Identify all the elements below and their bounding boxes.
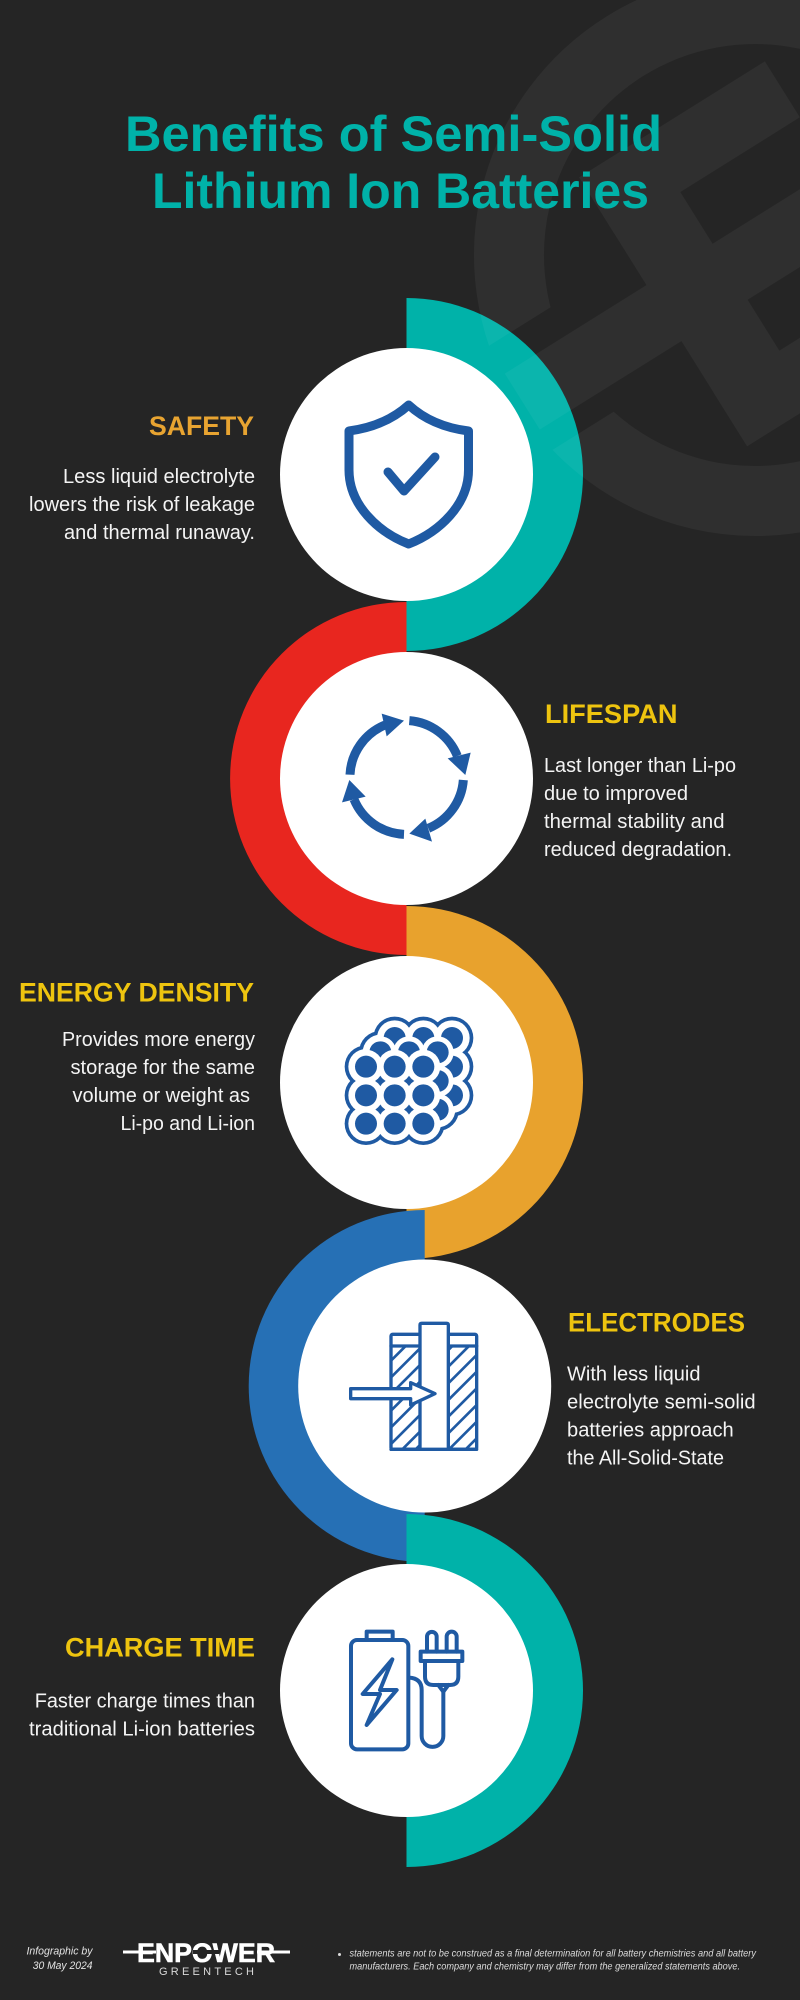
text: charge time description: traditional Li-ion batteries [29, 1719, 255, 1741]
text: energy density description [62, 1029, 255, 1135]
panel: safety [29, 348, 533, 601]
panel: energy density [19, 956, 533, 1209]
footer credit [26, 1946, 94, 1972]
white circle: electrodes [298, 1260, 551, 1512]
text: energy density description: storage for the same [70, 1057, 255, 1079]
text: charge time description [29, 1691, 255, 1741]
text: safety description: lowers the risk of leakage [29, 494, 255, 516]
white circle: safety [280, 348, 533, 601]
text: electrodes description: electrolyte semi-solid [567, 1392, 756, 1414]
icon: battery and plug [351, 1632, 462, 1749]
arc: teal safety [406, 298, 583, 651]
icon: atom lattice [345, 1017, 473, 1145]
heading: energy density: ENERGY DENSITY [19, 978, 254, 1008]
text: energy density description: Provides more energy [62, 1029, 255, 1051]
white circle: charge time [280, 1564, 533, 1817]
text: safety description [29, 466, 255, 544]
logo: Enpower Greentech: ENPOWER [137, 1938, 275, 1968]
footer disclaimer [338, 1949, 757, 1973]
text: electrodes description [567, 1364, 756, 1469]
arc: teal charge time [406, 1514, 583, 1867]
text: safety description: and thermal runaway. [64, 522, 255, 544]
title: Lithium Ion Batteries [152, 163, 649, 219]
text: lifespan description [544, 755, 736, 861]
arc: red lifespan [230, 602, 406, 955]
icon: shield with check [349, 405, 468, 544]
text: lifespan description: reduced degradation. [544, 839, 732, 861]
heading: safety: SAFETY [149, 411, 254, 441]
text: electrodes description: With less liquid [567, 1364, 700, 1386]
icon: cycle arrows [342, 714, 471, 842]
logo: Enpower Greentech: GREENTECH [159, 1966, 254, 1978]
footer disclaimer: manufacturers. Each company and chemistry may differ from the generalized statements above. [350, 1962, 740, 1973]
text: safety description: Less liquid electrolyte [63, 466, 255, 488]
panel: charge time [29, 1564, 533, 1817]
text: electrodes description: the All-Solid-State [567, 1447, 724, 1469]
text: lifespan description: thermal stability and [544, 811, 724, 833]
white circle: lifespan [280, 652, 533, 905]
footer credit: 30 May 2024 [33, 1960, 92, 1972]
text: charge time description: Faster charge times than [35, 1691, 255, 1713]
heading: lifespan: LIFESPAN [545, 699, 678, 729]
text: lifespan description: Last longer than Li-po [544, 755, 736, 777]
title [125, 106, 662, 219]
watermark logo [474, 0, 800, 536]
icon: electrode cell [351, 1323, 480, 1455]
white circle: energy density [280, 956, 533, 1209]
title: Benefits of Semi-Solid [125, 106, 662, 162]
text: energy density description: volume or weight as [72, 1085, 250, 1107]
heading: electrodes: ELECTRODES [568, 1308, 745, 1338]
logo: Enpower Greentech [123, 1938, 290, 1978]
footer disclaimer: statements are not to be construed as a final determination for all battery chemistries and all battery [350, 1949, 757, 1960]
text: lifespan description: due to improved [544, 783, 688, 805]
text: energy density description: Li-po and Li-ion [120, 1113, 255, 1135]
footer credit: Infographic by [26, 1946, 94, 1958]
panel: electrodes [298, 1260, 756, 1512]
text: electrodes description: batteries approach [567, 1420, 734, 1442]
arc: blue electrodes [249, 1210, 425, 1562]
arc: orange energy density [406, 906, 583, 1259]
panel: lifespan [280, 652, 736, 905]
heading: charge time: CHARGE TIME [65, 1633, 255, 1663]
